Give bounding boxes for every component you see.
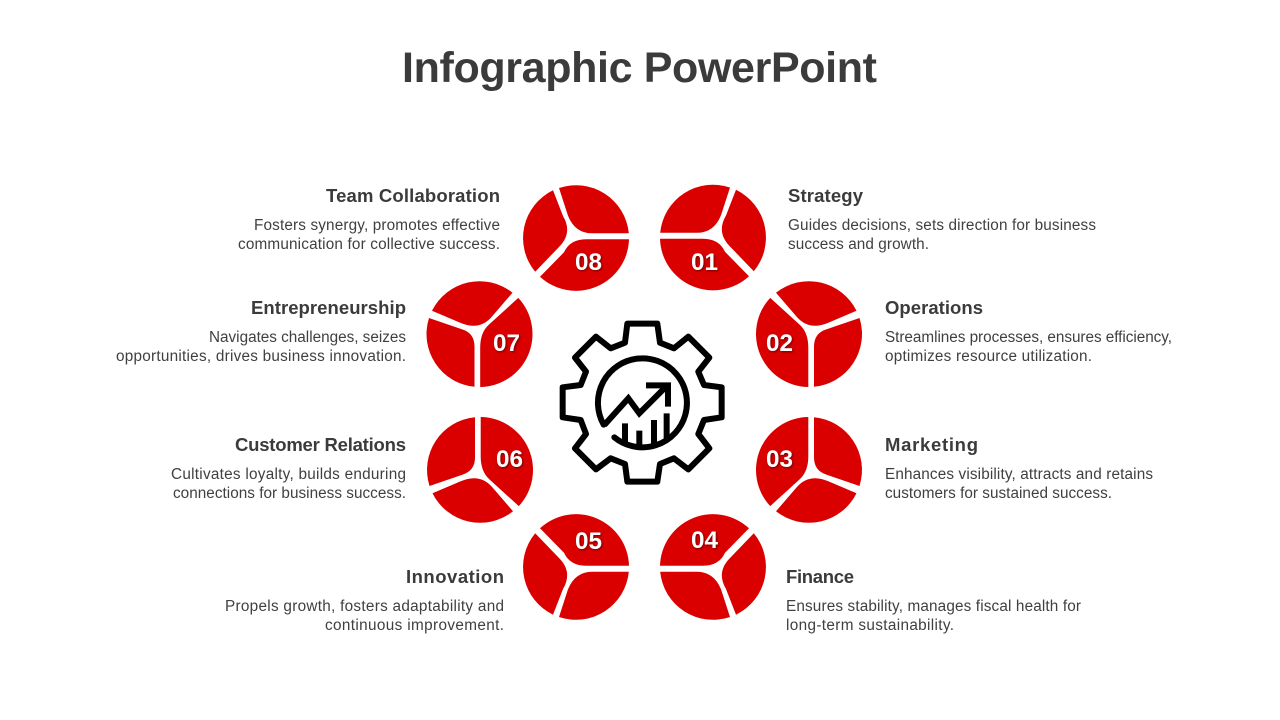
description: Strategy	[788, 217, 1096, 253]
description: Innovation: continuous improvement.	[325, 617, 504, 634]
description: Entrepreneurship: opportunities, drives business innovation.	[116, 348, 406, 365]
description: Marketing	[885, 466, 1153, 502]
heading: Innovation: Innovation	[406, 566, 504, 587]
heading: Entrepreneurship: Entrepreneurship	[251, 297, 406, 318]
description: Operations: optimizes resource utilization.	[885, 348, 1092, 365]
heading: Team Collaboration: Team Collaboration	[326, 185, 500, 206]
item 02: Operations	[756, 281, 1172, 387]
number 05: 05	[575, 528, 602, 555]
description: Finance: long-term sustainability.	[786, 617, 954, 634]
description: Customer Relations	[171, 466, 406, 502]
number 08: 08	[575, 249, 602, 276]
central icon: gear with growth chart	[563, 324, 722, 482]
segmented circle 07	[427, 281, 532, 387]
item 05: Innovation	[225, 514, 629, 634]
segmented circle 01	[660, 185, 766, 290]
description: Strategy: success and growth.	[788, 236, 929, 253]
description: Marketing: Enhances visibility, attracts and retains	[885, 466, 1153, 483]
segmented circle 06	[427, 417, 533, 523]
description: Team Collaboration: communication for collective success.	[238, 236, 500, 253]
heading: Customer Relations: Customer Relations	[235, 434, 406, 455]
heading: Operations: Operations	[885, 297, 983, 318]
description: Entrepreneurship: Navigates challenges, seizes	[209, 329, 406, 346]
heading: Finance: Finance	[786, 566, 854, 587]
number 07: 07	[493, 330, 520, 357]
description: Marketing: customers for sustained success.	[885, 485, 1112, 502]
description: Finance	[786, 598, 1081, 634]
segmented circle 08	[523, 185, 629, 291]
number 06: 06	[496, 446, 523, 473]
description: Team Collaboration: Fosters synergy, promotes effective	[254, 217, 500, 234]
item 06: Customer Relations	[171, 417, 533, 523]
description: Customer Relations: connections for business success.	[173, 485, 406, 502]
description: Innovation: Propels growth, fosters adaptability and	[225, 598, 504, 615]
segmented circle 05	[523, 514, 629, 620]
description: Customer Relations: Cultivates loyalty, builds enduring	[171, 466, 406, 483]
title: Infographic PowerPoint	[402, 44, 877, 92]
segmented circle 02	[756, 281, 862, 387]
segmented circle 04	[660, 514, 766, 620]
description: Strategy: Guides decisions, sets direction for business	[788, 217, 1096, 234]
item 04: Finance	[660, 514, 1081, 634]
segmented circle 03	[756, 417, 862, 523]
description: Operations	[885, 329, 1172, 365]
number 02: 02	[766, 330, 793, 357]
description: Finance: Ensures stability, manages fiscal health for	[786, 598, 1081, 615]
item 03: Marketing	[756, 417, 1153, 523]
item 01: Strategy	[660, 185, 1096, 290]
description: Innovation	[225, 598, 504, 634]
heading: Strategy: Strategy	[788, 185, 864, 206]
description: Team Collaboration	[238, 217, 500, 253]
number 01: 01	[691, 249, 718, 276]
description: Operations: Streamlines processes, ensures efficiency,	[885, 329, 1172, 346]
description: Entrepreneurship	[116, 329, 406, 365]
item 07: Entrepreneurship	[116, 281, 532, 387]
number 03: 03	[766, 446, 793, 473]
heading: Marketing: Marketing	[885, 434, 978, 455]
number 04: 04	[691, 527, 718, 554]
item 08: Team Collaboration	[238, 185, 629, 291]
